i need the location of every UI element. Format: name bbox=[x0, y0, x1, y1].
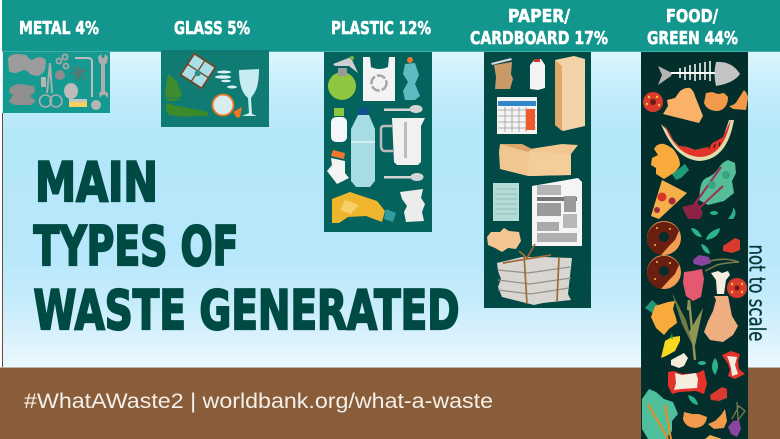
icon: purple flower bbox=[693, 255, 739, 271]
icon: tulip bbox=[672, 269, 704, 360]
icon: crushed can 2 bbox=[9, 84, 36, 105]
icon: broken green bottle bbox=[166, 103, 208, 117]
header band bbox=[2, 0, 780, 52]
panel: glass bbox=[161, 50, 269, 127]
icon: spoon bbox=[384, 105, 422, 113]
icon: tomato slice bbox=[643, 92, 663, 112]
icon: milk carton bbox=[530, 59, 545, 90]
icon: donut bbox=[647, 221, 681, 255]
icon: pizza slice bbox=[651, 180, 687, 219]
icon: watermelon bbox=[661, 119, 734, 161]
icon: crushed yellow bottle bbox=[332, 192, 396, 223]
note: not to scale: not to scale bbox=[744, 244, 768, 342]
icon: calendar bbox=[497, 97, 537, 134]
icon: crushed blue bottle bbox=[403, 57, 420, 100]
label: paper/cardboard: PAPER/ bbox=[508, 6, 570, 27]
sky background bbox=[2, 52, 780, 367]
icon: tin can with yellow band bbox=[64, 83, 87, 107]
icon: egg shell 4 bbox=[708, 409, 727, 429]
icon: crushed tube bbox=[327, 150, 349, 184]
icon: chard leaves bbox=[692, 160, 736, 212]
icon: small leaves bbox=[688, 358, 718, 405]
panel: plastic bbox=[324, 52, 432, 232]
title: MAIN bbox=[35, 151, 158, 214]
icon: cardboard box bbox=[499, 144, 578, 176]
icon: notepad bbox=[493, 183, 519, 221]
icon: gear bbox=[55, 70, 65, 80]
icon: measuring jug bbox=[381, 118, 425, 165]
icon: apple core 2 bbox=[668, 370, 707, 394]
icon: meat bone bbox=[704, 271, 738, 342]
icon: water bottle bbox=[351, 108, 375, 187]
icon: paper bag bbox=[555, 56, 585, 131]
label: plastic: PLASTIC 12% bbox=[331, 18, 431, 39]
left edge line bbox=[2, 113, 3, 367]
icon: nuts bbox=[56, 54, 68, 68]
label: food/green: FOOD/ bbox=[666, 6, 718, 27]
icon: allen key bbox=[75, 58, 92, 97]
label: food/green: GREEN 44% bbox=[647, 28, 738, 49]
icon: bitten toast bbox=[663, 88, 703, 123]
icon: tomato slice 2 bbox=[727, 278, 747, 298]
icon: crushed cup bbox=[400, 189, 425, 222]
icon: bitten orange bbox=[651, 144, 689, 180]
icon: pizza tip bbox=[705, 435, 722, 439]
icon: wine glass bbox=[239, 69, 259, 116]
icon: newspaper bbox=[532, 178, 582, 246]
icon: beetroot bbox=[682, 203, 703, 219]
icon: green leaves bbox=[691, 207, 736, 254]
label: food/green bbox=[647, 6, 738, 49]
icon: crushed can bbox=[8, 54, 46, 76]
title bbox=[34, 151, 460, 342]
icon: wire tangle bbox=[70, 65, 87, 82]
panel: metal bbox=[3, 52, 110, 113]
icon: egg shell 3 bbox=[683, 412, 707, 428]
icon: donut 2 bbox=[647, 255, 681, 289]
icon: yellow flower bbox=[661, 333, 688, 368]
label: paper/cardboard: CARDBOARD 17% bbox=[470, 28, 608, 49]
icon: tomato wedge bbox=[723, 238, 740, 253]
icon: egg shell 2 bbox=[729, 90, 748, 110]
icon: broken mirror bbox=[212, 94, 242, 118]
icon: broken window bbox=[180, 53, 216, 89]
label: metal: METAL 4% bbox=[19, 18, 99, 39]
icon: spanner bbox=[98, 54, 108, 98]
icon: white bottle bbox=[331, 108, 347, 142]
icon: green shards bbox=[165, 74, 182, 101]
icon: purple flower 2 bbox=[728, 402, 745, 437]
icon: crushed paper cup bbox=[491, 58, 513, 89]
icon: spray bottle bbox=[328, 56, 358, 100]
icon: glass shards bbox=[215, 70, 237, 88]
icon: plastic bag bbox=[363, 57, 395, 101]
panel: paper and cardboard bbox=[484, 52, 591, 308]
icon: washer bbox=[91, 100, 101, 110]
icon: bundle of paper bbox=[497, 244, 572, 305]
title: WASTE GENERATED bbox=[34, 279, 460, 342]
icon: fish skeleton bbox=[658, 61, 740, 86]
icon: kale bbox=[642, 389, 678, 439]
icon: spoon 2 bbox=[384, 173, 424, 181]
icon: tomato wedge 2 bbox=[710, 387, 727, 401]
label: paper/cardboard bbox=[470, 6, 608, 49]
icon: bolt bbox=[41, 77, 46, 87]
title: TYPES OF bbox=[34, 215, 238, 278]
icon: scissors bbox=[40, 63, 62, 107]
icon: bitten orange 2 bbox=[645, 300, 677, 335]
panel: food and green bbox=[641, 52, 748, 439]
icon: crumpled paper bbox=[487, 228, 521, 252]
footer text: #WhatAWaste2 | worldbank.org/what-a-waste bbox=[24, 390, 493, 413]
label: glass: GLASS 5% bbox=[174, 18, 250, 39]
icon: apple core bbox=[722, 351, 745, 379]
icon: egg shell bbox=[704, 92, 728, 111]
footer band bbox=[0, 367, 780, 439]
